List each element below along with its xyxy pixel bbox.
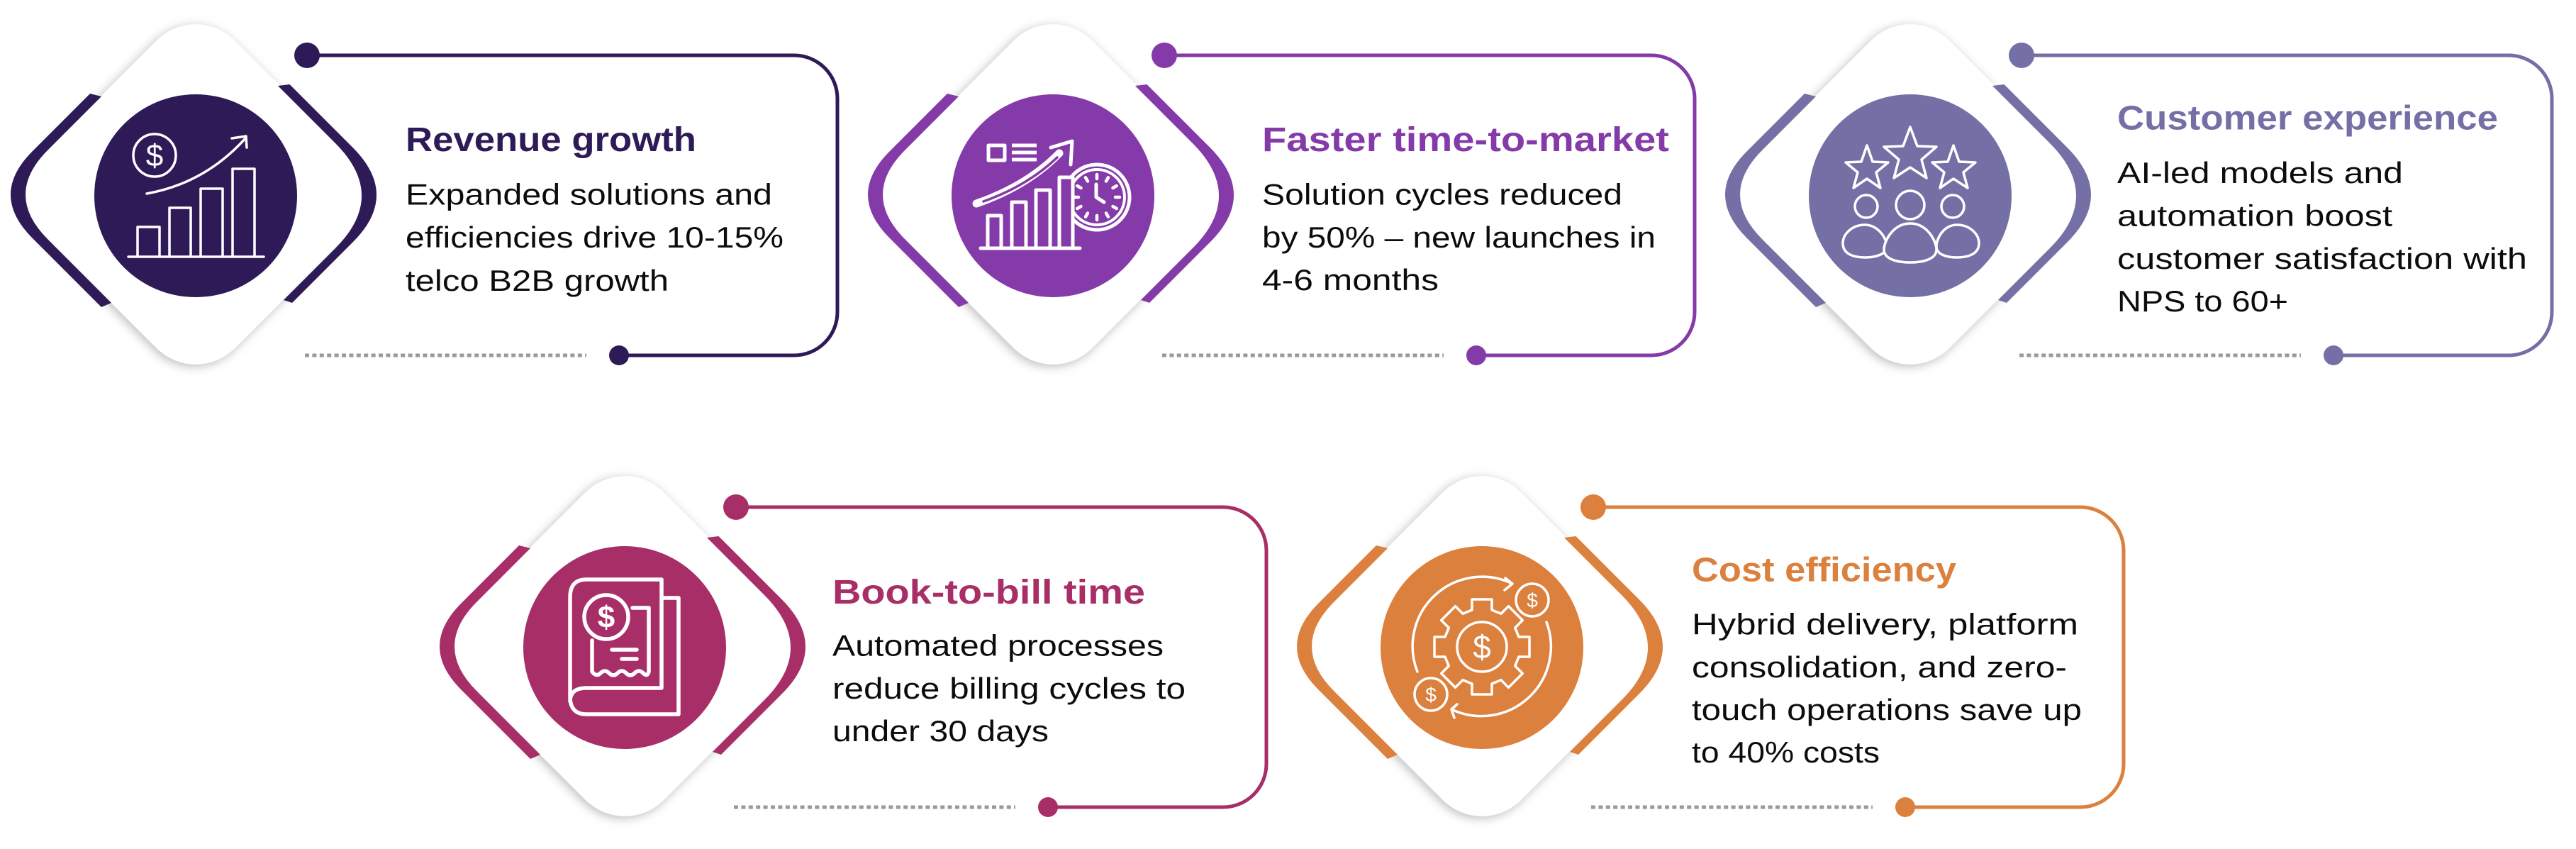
connector frame [1152,43,1695,365]
icon circle [523,546,726,749]
body text [2117,156,2527,318]
icon circle [94,94,297,297]
diamond backing [860,1,1246,387]
body text: efficiencies drive 10-15% [406,221,784,254]
body text: to 40% costs [1692,736,1880,769]
dotted divider [1591,806,1873,809]
diamond brackets [440,536,805,759]
body text: touch operations save up [1692,693,2082,726]
diamond backing [432,453,818,839]
dotted divider [305,353,586,357]
body text [406,177,784,297]
icon: stars and people [1843,127,1979,262]
body text: Automated processes [832,628,1164,662]
icon: invoice book: $ [598,600,615,635]
body text [1692,607,2082,769]
diamond backing [3,1,389,387]
body text: telco B2B growth [406,264,669,297]
panel: cost efficiency [1289,453,2124,839]
dotted divider [734,806,1015,809]
connector frame [723,494,1266,817]
dotted divider [2019,353,2301,357]
dotted divider [1162,353,1444,357]
icon: chart with clock [976,141,1130,248]
body text [1262,177,1656,296]
icon: gear with dollar coins: $ [1473,628,1491,665]
icon: invoice book [570,579,679,714]
icon: gear with dollar coins: $ [1527,589,1538,611]
body text: 4-6 months [1262,263,1439,296]
heading: Faster time-to-market [1262,121,1669,159]
body text: by 50% – new launches in [1262,221,1656,254]
connector frame [294,43,837,365]
icon: bar chart with dollar coin and arrow [128,134,264,257]
heading: Customer experience [2117,99,2498,138]
icon circle [1809,94,2012,297]
icon: gear with dollar coins [1412,577,1551,718]
panel: customer experience [1717,1,2552,387]
body text: customer satisfaction with [2117,242,2527,275]
diamond brackets [1297,536,1663,759]
panel: revenue growth [3,1,837,387]
panel: book-to-bill time [432,453,1266,839]
body text: under 30 days [832,714,1049,748]
body text: NPS to 60+ [2117,284,2288,318]
body text: Expanded solutions and [406,177,772,211]
body text: automation boost [2117,199,2392,233]
heading: Cost efficiency [1692,552,1956,589]
diamond brackets [868,84,1234,307]
body text: Solution cycles reduced [1262,177,1622,211]
diamond brackets [1725,84,2091,307]
icon: bar chart with dollar coin and arrow: $ [146,138,163,173]
body text: Hybrid delivery, platform [1692,607,2078,641]
heading: Book-to-bill time [832,574,1145,611]
diamond brackets [11,84,377,307]
icon circle [1381,546,1583,749]
body text: AI-led models and [2117,156,2403,189]
body text [832,628,1186,748]
body text: consolidation, and zero- [1692,650,2067,684]
icon circle [952,94,1154,297]
diamond backing [1289,453,1675,839]
panel: faster time-to-market [860,1,1695,387]
diamond backing [1717,1,2103,387]
icon: gear with dollar coins: $ [1425,684,1437,706]
heading: Revenue growth [406,121,696,159]
connector frame [1580,494,2124,817]
connector frame [2009,43,2552,365]
body text: reduce billing cycles to [832,672,1186,705]
